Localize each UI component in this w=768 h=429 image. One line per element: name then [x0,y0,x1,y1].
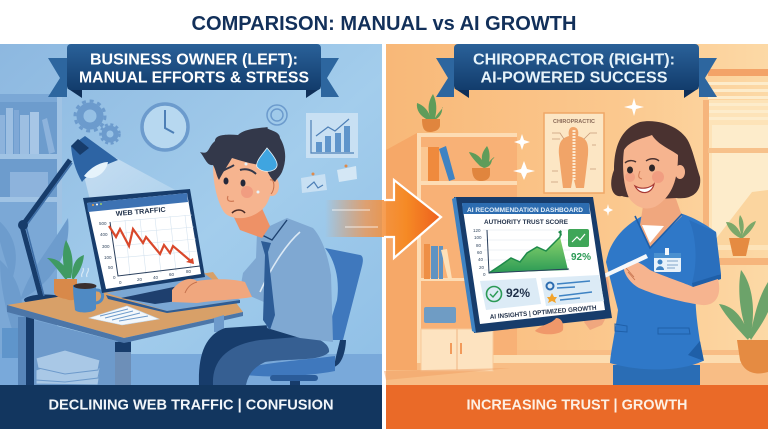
laptop [83,189,240,313]
laptop chart [99,207,200,285]
legs [199,325,329,385]
far arm [584,270,610,330]
laptop chart: 400 [100,232,108,237]
panel: chiropractor [384,44,768,429]
plant background [0,218,68,358]
footer band: declining [0,385,382,429]
laptop chart: 20 [137,277,143,282]
wall chart [301,113,358,193]
laptop chart: 50 [108,265,114,270]
chiropractor figure [584,121,721,385]
trust chart: 20 [479,265,485,270]
banner: chiropractor: AI-POWERED SUCCESS [480,70,668,86]
scrubs [606,212,720,370]
insights card [541,275,604,306]
laptop chart: 60 [169,272,175,277]
trust chart [473,228,570,277]
tablet: AUTHORITY TRUST SCORE [484,219,569,226]
laptop chart: 40 [153,275,159,280]
desk lamp [18,136,118,306]
small score: 92% [571,252,591,263]
banner: business owner: MANUAL EFFORTS & STRESS [79,70,309,86]
banner: business owner: BUSINESS OWNER (LEFT): [90,52,298,68]
brows eyes mouth [220,165,256,174]
neck [228,204,270,238]
footer band: declining: DECLINING WEB TRAFFIC | CONFUSION [48,396,334,414]
torso shirt [240,218,333,342]
floor [0,354,382,385]
trust chart: 120 [473,228,481,233]
banner: business owner [48,44,339,98]
score card: 92% [506,286,530,300]
pockets [615,324,690,334]
face [213,139,274,218]
footer band: increasing: INCREASING TRUST | GROWTH [466,396,688,414]
laptop chart: 0 [119,280,122,285]
pen arm [624,261,719,305]
footer band: increasing [386,385,768,429]
tablet [452,197,612,334]
hair [200,127,285,182]
trust chart: 60 [477,250,483,255]
banner: chiropractor: CHIROPRACTOR (RIGHT): [473,52,675,68]
icon: plant on top of shelf [417,94,443,132]
title: COMPARISON: MANUAL vs AI GROWTH [192,13,576,35]
icon: floor plant [719,270,768,374]
anatomy poster [544,113,604,193]
bookshelf [384,133,517,380]
trust chart: 0 [483,272,486,277]
pants [613,365,700,385]
icon: plant pot [47,240,84,300]
face [623,135,678,209]
trust chart: 100 [474,235,482,240]
laptop chart: 80 [186,269,192,274]
laptop chart: 500 [99,221,107,226]
hair back [611,121,700,200]
icon: sweat drop [257,148,277,171]
icon: coffee mug [73,268,103,312]
tablet: AI INSIGHTS | OPTIMIZED GROWTH [490,305,597,321]
business owner figure [172,127,333,342]
panel: business owner [0,44,382,429]
laptop chart: 100 [104,255,112,260]
bookshelf [0,94,62,354]
forearms and hands [172,279,252,303]
stylus [593,254,648,282]
arrow: manual to AI [325,180,441,258]
banner: chiropractor [436,44,717,98]
light beam [84,158,190,240]
icon: wall clock [142,104,188,150]
icon: gears [75,101,287,144]
id badge [654,248,681,272]
anatomy poster: CHIROPRACTIC [553,119,595,125]
icon: plant on shelf [469,146,494,181]
trust chart: 80 [476,243,482,248]
holding hand [535,318,563,334]
desk [7,272,243,385]
paper stack [36,350,100,385]
tie [261,241,275,330]
trust chart: 40 [478,257,484,262]
icon: sparkles [513,98,644,216]
icon: window plant [726,215,756,256]
chair [247,248,363,385]
tablet: AI RECOMMENDATION DASHBOARD [467,208,584,214]
laptop chart: 0 [113,275,116,280]
laptop chart: WEB TRAFFIC [116,207,166,218]
laptop chart: 300 [102,244,110,249]
neck and collar [640,196,682,247]
score card [480,278,541,310]
small score [568,229,591,263]
window and blinds [703,69,768,265]
document on desk [89,306,159,325]
